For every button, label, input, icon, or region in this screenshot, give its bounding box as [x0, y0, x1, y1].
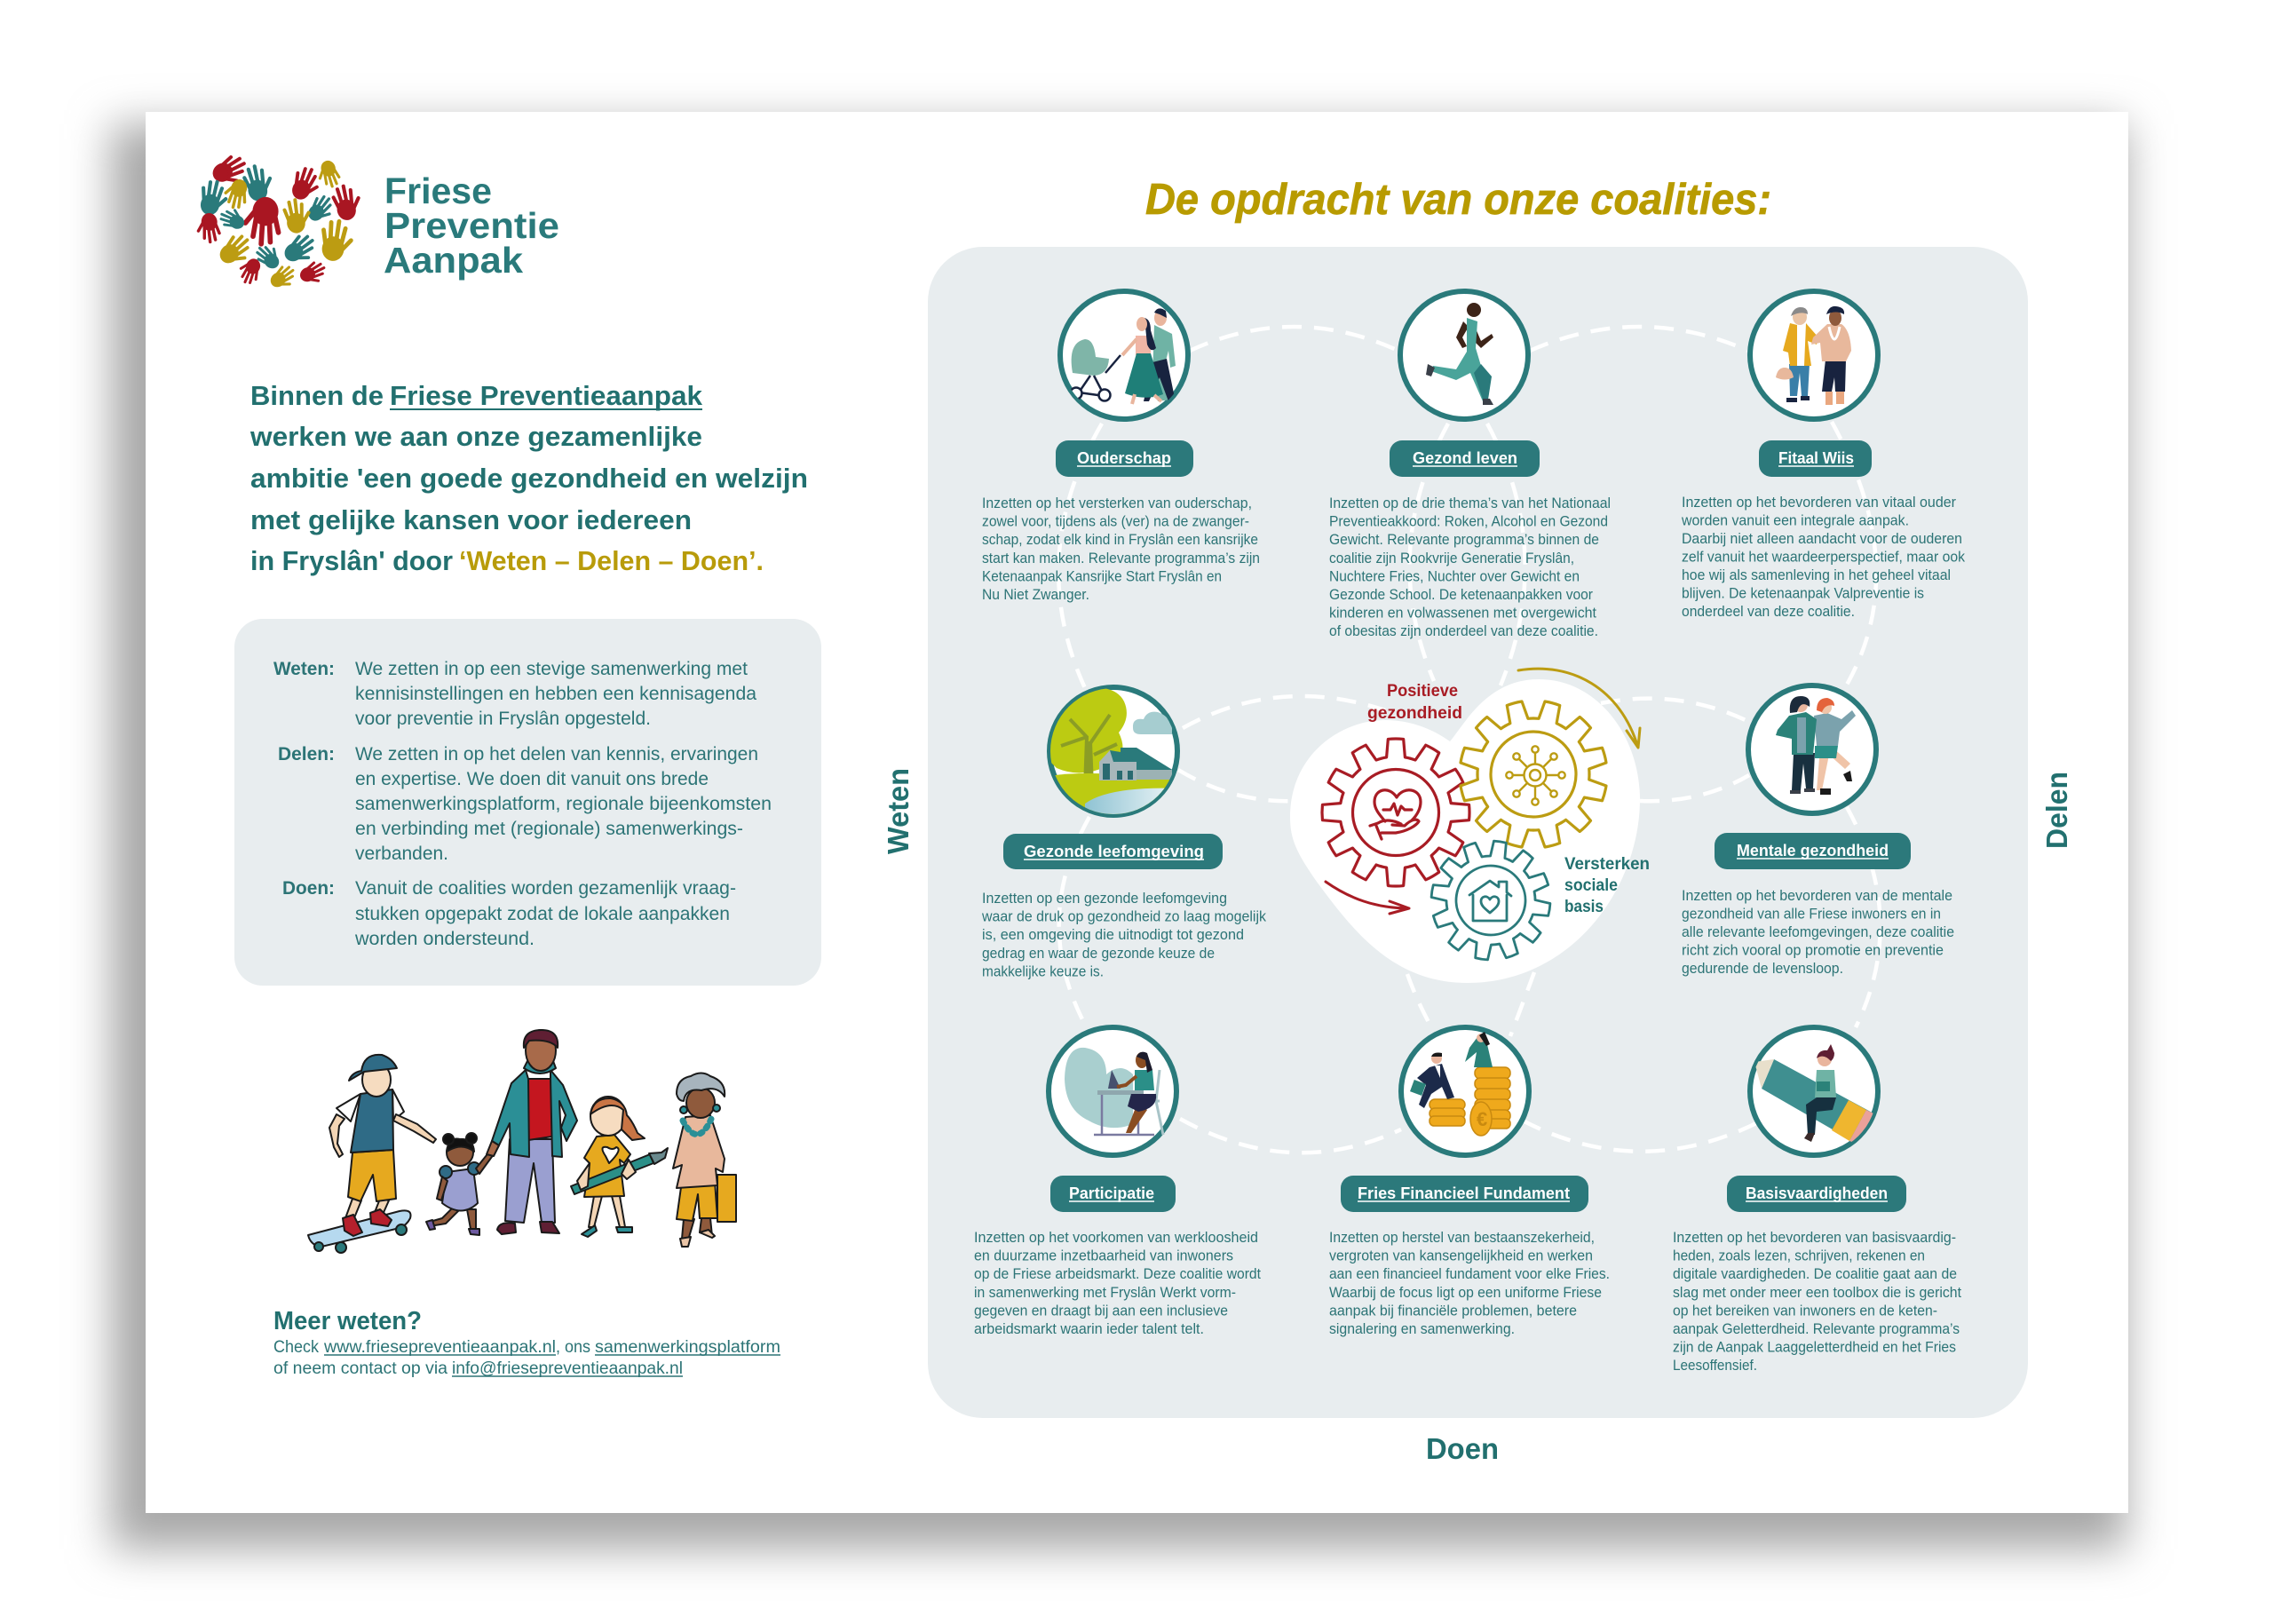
- pill: [1759, 440, 1872, 477]
- text block: op de Friese arbeidsmarkt. Deze coalitie wordt: [974, 1266, 1261, 1282]
- text block: Ketenaanpak Kansrijke Start Fryslân en: [982, 568, 1222, 584]
- pill: [1390, 440, 1540, 477]
- panel: weten delen doen: samenwerkingsplatform, regionale bijeenkomsten: [355, 794, 772, 814]
- figure: toddler: [426, 1133, 494, 1235]
- text block: Leesoffensief.: [1673, 1358, 1757, 1374]
- panel: weten delen doen: verbanden.: [355, 844, 448, 864]
- text block: onderdeel van deze coalitie.: [1682, 604, 1855, 620]
- page card: [146, 112, 2128, 1513]
- text block: hoe wij als samenleving in het geheel vitaal: [1682, 567, 1951, 583]
- pill: [1050, 1176, 1176, 1212]
- text block: aanpak bij financiële problemen, betere: [1329, 1303, 1577, 1319]
- text block: richt zich vooral op promotie en preventie: [1682, 943, 1944, 959]
- label: versterken sociale basis: Versterken: [1564, 855, 1650, 874]
- text block: aanpak Geletterdheid. Relevante programma’s: [1673, 1321, 1960, 1337]
- coalition: Gezond leven: [1329, 291, 1611, 639]
- wordmark: [384, 170, 559, 281]
- wordmark: Friese: [384, 170, 492, 211]
- contact: meer weten: , ons: [556, 1338, 590, 1357]
- wordmark: Aanpak: [384, 240, 523, 281]
- icon: two older women: [1750, 291, 1878, 419]
- arrow: red: [1326, 882, 1409, 914]
- text block: start kan maken. Relevante programma’s zijn: [982, 551, 1260, 566]
- text block: [1682, 888, 1954, 977]
- text block: slag met onder meer een toolbox die is gericht: [1673, 1285, 1961, 1301]
- text block: Waarbij de focus ligt op een uniforme Friese: [1329, 1285, 1602, 1301]
- label: versterken sociale basis: basis: [1564, 898, 1604, 916]
- text block: gedurende de levensloop.: [1682, 961, 1843, 977]
- label: versterken sociale basis: sociale: [1564, 876, 1618, 895]
- text block: digitale vaardigheden. De coalitie gaat aan de: [1673, 1266, 1957, 1282]
- text block: Gewicht. Relevante programma’s binnen de: [1329, 532, 1599, 548]
- coalition: Basisvaardigheden: [1673, 1027, 1961, 1374]
- contact: meer weten: Check: [273, 1338, 319, 1357]
- panel: weten delen doen: We zetten in op een stevige samenwerking met: [355, 659, 748, 679]
- axis label: Doen: Doen: [1426, 1432, 1499, 1465]
- text block: [982, 495, 1260, 603]
- panel: weten delen doen: kennisinstellingen en hebben een kennisagenda: [355, 684, 756, 704]
- coalition: Fries Financieel Fundament: [1329, 1027, 1610, 1337]
- text block: waar de druk op gezondheid zo laag mogelijk: [981, 909, 1267, 925]
- coalition: Fitaal Wiis: [1681, 291, 1966, 620]
- axis label: Delen: Delen: [2040, 772, 2073, 849]
- panel: weten delen doen: en verbinding met (regionale) samenwerkings-: [355, 819, 743, 839]
- text block: zijn de Aanpak Laaggeletterdheid en het Fries: [1673, 1340, 1956, 1356]
- text block: zowel voor, tijdens als (ver) na de zwanger-: [982, 514, 1249, 530]
- text block: signalering en samenwerking.: [1329, 1321, 1515, 1337]
- text block: worden vanuit een integrale aanpak.: [1681, 513, 1909, 529]
- icon: hands cluster: [195, 153, 363, 293]
- text block: blijven. De ketenaanpak Valpreventie is: [1682, 586, 1924, 602]
- label: positieve gezondheid: Positieve: [1387, 682, 1458, 701]
- pill: Basisvaardigheden: [1746, 1184, 1888, 1202]
- pill: [1056, 440, 1193, 477]
- intro heading: ambitie 'een goede gezondheid en welzijn: [250, 463, 808, 494]
- gear: gold network: [1443, 684, 1624, 865]
- gear: teal house: [1422, 832, 1559, 969]
- pill: Ouderschap: [1077, 449, 1171, 467]
- figure: man: [487, 1030, 577, 1234]
- panel: weten delen doen: worden ondersteund.: [354, 929, 535, 949]
- text block: [1329, 495, 1611, 639]
- white blob: [1290, 679, 1640, 983]
- text block: zelf vanuit het waardeerperspectief, maar ook: [1682, 549, 1966, 565]
- icon: woman reading on pencil: [1750, 1027, 1878, 1155]
- pill: Gezond leven: [1413, 449, 1517, 467]
- coalition: Participatie: [974, 1027, 1261, 1337]
- text block: en duurzame inzetbaarheid van inwoners: [974, 1248, 1233, 1264]
- text block: coalitie zijn Rookvrije Generatie Fryslân,: [1329, 551, 1574, 566]
- coalition: Mentale gezondheid: [1682, 685, 1954, 977]
- panel: weten delen doen: Weten:: [273, 659, 335, 679]
- panel: coalities: [928, 247, 2028, 1418]
- icon: people on coin stacks: [1401, 1027, 1529, 1155]
- text block: of obesitas zijn onderdeel van deze coalitie.: [1329, 623, 1598, 639]
- intro heading: ‘Weten – Delen – Doen’.: [459, 545, 764, 576]
- text block: op het bereiken van inwoners en de keten-: [1673, 1303, 1937, 1319]
- figure: girl with pen: [571, 1097, 668, 1237]
- contact: meer weten: [273, 1307, 780, 1378]
- text block: [1329, 1230, 1610, 1337]
- panel: weten delen doen: [234, 619, 821, 986]
- text block: arbeidsmarkt waarin ieder talent telt.: [974, 1321, 1204, 1337]
- icon: people on coin stacks: €: [1477, 1108, 1487, 1130]
- text block: Inzetten op het bevorderen van basisvaardig-: [1673, 1230, 1956, 1246]
- wordmark: Preventie: [384, 205, 559, 246]
- text block: [981, 891, 1267, 979]
- illustration: family group: [308, 1030, 736, 1253]
- intro heading: Friese Preventieaanpak: [390, 380, 703, 411]
- logo: hands and wordmark: [195, 153, 559, 293]
- text block: gezondheid van alle Friese inwoners en in: [1682, 906, 1941, 922]
- contact: meer weten: samenwerkingsplatform: [595, 1338, 780, 1357]
- pill: Participatie: [1069, 1184, 1154, 1202]
- text block: Preventieakkoord: Roken, Alcohol en Gezond: [1329, 514, 1608, 530]
- intro heading: werken we aan onze gezamenlijke: [249, 421, 702, 452]
- text block: [1681, 495, 1966, 620]
- text block: Gezonde School. De ketenaanpakken voor: [1329, 587, 1593, 603]
- intro heading: Binnen de: [250, 380, 384, 411]
- text block: Inzetten op het bevorderen van de mentale: [1682, 888, 1952, 904]
- text block: Nu Niet Zwanger.: [982, 587, 1089, 603]
- text block: aan een financieel fundament voor elke Fries.: [1329, 1266, 1610, 1282]
- pill: [1715, 833, 1911, 869]
- panel: weten delen doen: Vanuit de coalities worden gezamenlijk vraag-: [355, 878, 736, 899]
- card shadow: [111, 124, 2126, 1549]
- label: positieve gezondheid: gezondheid: [1367, 704, 1462, 723]
- label: versterken sociale basis: [1564, 855, 1650, 916]
- panel: weten delen doen: Delen:: [278, 744, 335, 764]
- intro heading: met gelijke kansen voor iedereen: [250, 504, 692, 535]
- text block: Inzetten op de drie thema’s van het Nationaal: [1329, 495, 1611, 511]
- contact: meer weten: of neem contact op via: [273, 1359, 447, 1378]
- icon: runner: [1400, 291, 1528, 419]
- pill: Fitaal Wiis: [1778, 449, 1854, 467]
- panel: weten delen doen: We zetten in op het delen van kennis, ervaringen: [355, 744, 758, 764]
- icon: tree and house: [1043, 687, 1181, 826]
- pill: [1727, 1176, 1906, 1212]
- central gears diagram: [1290, 669, 1650, 983]
- text block: [974, 1230, 1261, 1337]
- text block: gegeven en draagt bij aan een inclusieve: [974, 1303, 1228, 1319]
- text block: Nuchtere Fries, Nuchter over Gewicht en: [1329, 568, 1580, 584]
- figure: grandmother: [673, 1073, 736, 1247]
- icon: two friends: [1748, 685, 1876, 813]
- intro heading: [249, 380, 808, 576]
- label: positieve gezondheid: [1367, 682, 1462, 723]
- panel: weten delen doen: stukken opgepakt zodat de lokale aanpakken: [355, 904, 730, 924]
- axis label: Weten: Weten: [882, 768, 915, 854]
- panel: weten delen doen: Doen:: [282, 878, 335, 899]
- icon: parents with pram: [1060, 291, 1188, 419]
- contact: meer weten: www.friesepreventieaanpak.nl: [323, 1338, 556, 1357]
- icon: woman at laptop: [1049, 1027, 1176, 1155]
- text block: alle relevante leefomgevingen, deze coalitie: [1682, 924, 1954, 940]
- text block: Inzetten op het bevorderen van vitaal ouder: [1682, 495, 1956, 511]
- coalition: Gezonde leefomgeving: [981, 687, 1267, 979]
- text block: in samenwerking met Fryslân Werkt vorm-: [974, 1285, 1236, 1301]
- text block: is, een omgeving die uitnodigt tot gezond: [982, 927, 1244, 943]
- text block: Inzetten op het voorkomen van werkloosheid: [974, 1230, 1258, 1246]
- text block: Inzetten op een gezonde leefomgeving: [982, 891, 1227, 907]
- intro heading: in Fryslân' door: [250, 545, 453, 576]
- text block: kinderen en volwassenen met overgewicht: [1329, 606, 1596, 622]
- panel: weten delen doen: en expertise. We doen dit vanuit ons brede: [355, 769, 709, 789]
- title: De opdracht van onze coalities:: [1145, 176, 1771, 224]
- text block: heden, zoals lezen, schrijven, rekenen en: [1673, 1248, 1925, 1264]
- pill: Mentale gezondheid: [1737, 842, 1889, 860]
- pill: [1003, 834, 1223, 869]
- text block: gedrag en waar de gezonde keuze de: [982, 946, 1215, 962]
- gear: red heart: [1322, 739, 1469, 886]
- text block: Daarbij niet alleen aandacht voor de ouderen: [1682, 531, 1962, 547]
- contact: meer weten: info@friesepreventieaanpak.nl: [452, 1359, 683, 1378]
- figure: skater: [308, 1055, 436, 1253]
- arrow: gold: [1518, 669, 1640, 748]
- pill: Gezonde leefomgeving: [1024, 843, 1204, 860]
- text block: makkelijke keuze is.: [982, 963, 1104, 979]
- text block: vergroten van kansengelijkheid en werken: [1329, 1248, 1593, 1264]
- text block: Inzetten op het versterken van ouderschap,: [982, 495, 1252, 511]
- panel: weten delen doen: voor preventie in Fryslân opgesteld.: [355, 709, 651, 729]
- pill: [1341, 1176, 1588, 1212]
- text block: Inzetten op herstel van bestaanszekerheid,: [1329, 1230, 1595, 1246]
- pill: Fries Financieel Fundament: [1358, 1184, 1570, 1202]
- contact: meer weten: Meer weten?: [273, 1307, 422, 1335]
- text block: schap, zodat elk kind in Fryslân een kansrijke: [982, 532, 1258, 548]
- coalition: Ouderschap: [982, 291, 1260, 603]
- text block: [1673, 1230, 1961, 1374]
